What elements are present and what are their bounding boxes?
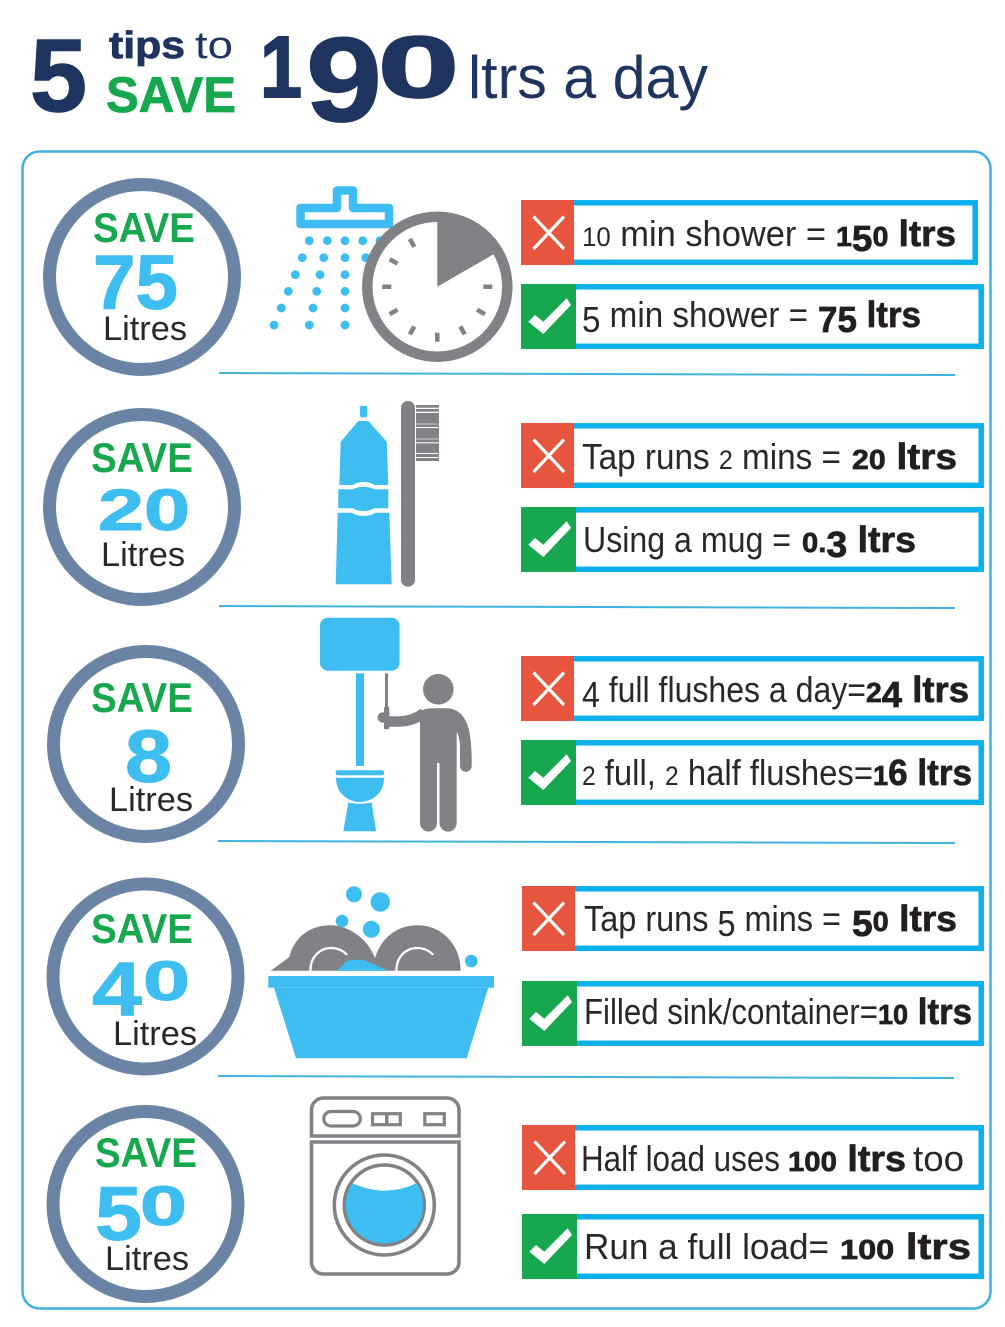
comparison: 4 full flushes: ltrs [902, 669, 969, 710]
badge: save 40 litres: 4 [92, 947, 142, 1032]
badge: save 20 litres: Litres [101, 536, 185, 574]
comparison: filled sink or container [522, 981, 981, 1046]
icon: dishes in a tub [268, 886, 494, 1058]
comparison: half load [522, 1125, 981, 1190]
comparison: tap runs 5 mins: 5 [852, 903, 873, 944]
comparison: tap runs 2 mins [521, 423, 981, 488]
comparison: tap runs 2 mins: Tap runs 2 mins = [582, 436, 841, 477]
badge: save 75 litres [50, 184, 234, 370]
comparison: 2 full 2 half flushes: 2 full, 2 half flushes= [582, 752, 873, 793]
badge: save 8 litres [54, 652, 238, 836]
comparison: 2 full 2 half flushes [521, 740, 981, 805]
badge: save 40 litres: 0 [143, 949, 190, 1012]
title: tips [109, 25, 185, 67]
comparison: 5 min shower: min shower = [600, 294, 808, 335]
comparison: filled sink or container: Filled sink/container= [584, 991, 878, 1032]
comparison: tap runs 5 mins: ltrs [899, 898, 955, 939]
comparison: tap runs 5 mins [522, 886, 981, 951]
badge: save 50 litres [53, 1112, 238, 1296]
comparison: 5 min shower: 5 [582, 299, 600, 340]
comparison: 4 full flushes [521, 656, 981, 721]
comparison: filled sink or container: 10 ltrs [878, 991, 972, 1032]
badge: save 20 litres [50, 414, 234, 600]
comparison: tap runs 5 mins: mins = [736, 898, 841, 939]
badge: save 20 litres: 20 [98, 478, 190, 543]
badge: save 20 litres: SAVE [91, 434, 193, 481]
badge: save 8 litres: 8 [125, 715, 172, 798]
comparison: half load: Half load uses [581, 1138, 780, 1179]
badge: save 50 litres: SAVE [95, 1129, 197, 1176]
icon: shower and timer [270, 190, 507, 357]
title: to [195, 25, 233, 67]
comparison: 4 full flushes: 2 [866, 677, 882, 708]
comparison: 10 min shower: 10 min shower = [582, 213, 826, 254]
comparison: run a full load: 100 ltrs [840, 1226, 971, 1267]
title: SAVE [106, 67, 236, 123]
title: 9 [306, 13, 382, 147]
comparison: using a mug: 3 [826, 524, 847, 565]
badge: save 50 litres: Litres [105, 1240, 189, 1278]
comparison: run a full load: Run a full load= [584, 1226, 829, 1267]
comparison: using a mug [521, 507, 981, 572]
comparison: using a mug: Using a mug = [583, 519, 791, 560]
badge: save 75 litres: Litres [103, 310, 187, 348]
comparison: using a mug: ltrs [847, 519, 916, 560]
comparison: 4 full flushes: 4 [882, 674, 902, 715]
badge: save 50 litres: 0 [140, 1174, 187, 1237]
comparison: 10 min shower: 5 [852, 218, 872, 259]
badge: save 40 litres [53, 884, 238, 1069]
comparison: run a full load [522, 1214, 981, 1279]
title [30, 13, 708, 147]
icon: toothpaste and toothbrush [336, 401, 439, 587]
badge: save 50 litres: 5 [95, 1172, 142, 1257]
title: 0 [378, 19, 459, 116]
comparison: half load: too [913, 1138, 964, 1179]
comparison: 4 full flushes: full flushes a day= [600, 669, 866, 710]
comparison: 10 min shower [521, 200, 975, 265]
badge: save 75 litres: SAVE [93, 204, 195, 251]
badge: save 75 litres: 75 [93, 240, 178, 326]
comparison: tap runs 5 mins: 5 [717, 903, 736, 944]
comparison: 4 full flushes: 4 [582, 674, 600, 715]
icon: toilet and person [320, 618, 472, 832]
comparison: 10 min shower: ltrs [898, 213, 954, 254]
comparison: half load: 100 ltrs [788, 1138, 906, 1179]
badge: save 40 litres: Litres [113, 1015, 197, 1053]
badge: save 40 litres: SAVE [91, 905, 193, 952]
comparison: tap runs 5 mins: 0 [873, 906, 889, 937]
badge: save 8 litres: Litres [109, 781, 193, 819]
comparison: 2 full 2 half flushes: 16 ltrs [873, 752, 972, 793]
comparison: tap runs 5 mins: Tap runs [584, 898, 722, 939]
title: 5 [30, 18, 87, 133]
comparison: 5 min shower [521, 284, 981, 349]
comparison: 10 min shower: 0 [872, 221, 888, 252]
icon: washing machine [312, 1098, 459, 1274]
title: 1 [260, 19, 302, 116]
comparison: 5 min shower: ltrs [857, 294, 921, 335]
title: ltrs a day [468, 44, 708, 111]
badge: save 8 litres: SAVE [91, 674, 193, 721]
comparison: 10 min shower: 1 [836, 221, 852, 252]
comparison: tap runs 2 mins: 20 ltrs [852, 436, 957, 477]
comparison: using a mug: 0. [802, 527, 826, 558]
comparison: 5 min shower: 75 [818, 299, 857, 340]
